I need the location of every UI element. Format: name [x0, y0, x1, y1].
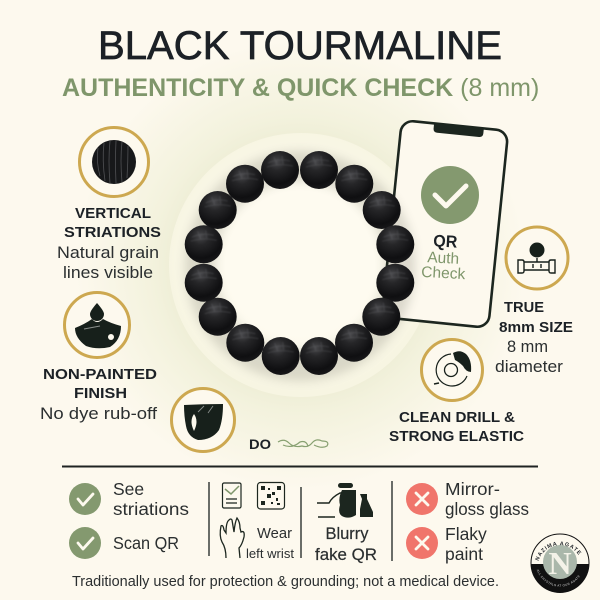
bracelet [185, 151, 414, 375]
logo badge [530, 534, 590, 593]
text: flaky paint: paint [445, 544, 483, 564]
don't list [406, 479, 529, 564]
logo badge: ALL CRYSTALS AT OUR AGATE [536, 570, 580, 587]
subtitle: AUTHENTICITY & QUICK CHECK (8 mm) [62, 74, 539, 102]
text: non-painted finish: NON-PAINTED [43, 367, 157, 383]
check icon: see striations [69, 483, 101, 515]
text: wear left wrist [246, 525, 295, 561]
text: scan QR: Scan QR [113, 533, 179, 553]
phone: QR auth check: QR [433, 231, 458, 252]
footer disclaimer: Traditionally used for protection & grounding; not a medical device. [72, 574, 499, 590]
phone: QR auth check: Check [421, 264, 466, 283]
cross icon: flaky paint [406, 527, 438, 559]
icon: document with check [222, 483, 241, 508]
title: BLACK TOURMALINE [98, 24, 502, 68]
text: see striations [113, 479, 189, 519]
label: DO with green squiggle: DO [249, 437, 271, 452]
icon: vertical striations [80, 128, 148, 196]
text: vertical striations: STRIATIONS [64, 225, 161, 241]
text: see striations: striations [113, 499, 189, 519]
text: true 8mm size: diameter [495, 358, 564, 376]
text: true 8mm size: 8 mm [507, 338, 548, 356]
icon: hand on wrist [220, 518, 244, 558]
text: vertical striations: VERTICAL [75, 206, 151, 222]
do list [69, 479, 189, 559]
text: true 8mm size [495, 300, 573, 376]
text: blurry fake QR: fake QR [315, 546, 377, 564]
logo badge: N [548, 545, 572, 581]
text: blurry fake QR [315, 525, 377, 564]
icon: QR code [258, 482, 284, 509]
text: clean drill and strong elastic: STRONG ELASTIC [389, 429, 525, 445]
text: vertical striations [57, 206, 161, 282]
text: wear left wrist: Wear [257, 525, 292, 542]
text: vertical striations: lines visible [63, 264, 153, 282]
text: vertical striations: Natural grain [57, 244, 159, 262]
text: clean drill and strong elastic [389, 410, 525, 445]
text: non-painted finish: No dye rub-off [40, 405, 157, 423]
text: mirror gloss glass [445, 479, 529, 519]
text: mirror gloss glass: Mirror- [445, 479, 500, 499]
central disc [169, 133, 433, 397]
text: non-painted finish [40, 367, 157, 423]
text: flaky paint: Flaky [445, 524, 487, 544]
icon: bead cross-section [172, 388, 234, 452]
text: wear left wrist: left wrist [246, 547, 295, 561]
cross icon: mirror gloss [406, 483, 438, 515]
label: DO with green squiggle [249, 437, 328, 452]
icon: clean drill [422, 340, 482, 400]
text: clean drill and strong elastic: CLEAN DRILL & [399, 410, 516, 426]
icon: hand holding fake bottle [317, 483, 373, 518]
phone: QR auth check: Auth [427, 249, 460, 268]
icon: true 8mm size [506, 227, 568, 289]
text: see striations: See [113, 479, 144, 499]
text: true 8mm size: 8mm SIZE [499, 320, 573, 336]
logo badge: NAZIMA AGATE [535, 542, 582, 561]
phone: QR auth check [382, 120, 508, 328]
icon: non-painted finish [64, 292, 130, 358]
text: blurry fake QR: Blurry [325, 525, 369, 543]
text: non-painted finish: FINISH [74, 386, 127, 402]
check icon: scan QR [69, 527, 101, 559]
text: true 8mm size: TRUE [504, 300, 544, 316]
soft glow behind bracelet [75, 40, 525, 490]
text: mirror gloss glass: gloss glass [445, 499, 529, 519]
text: flaky paint [445, 524, 487, 564]
